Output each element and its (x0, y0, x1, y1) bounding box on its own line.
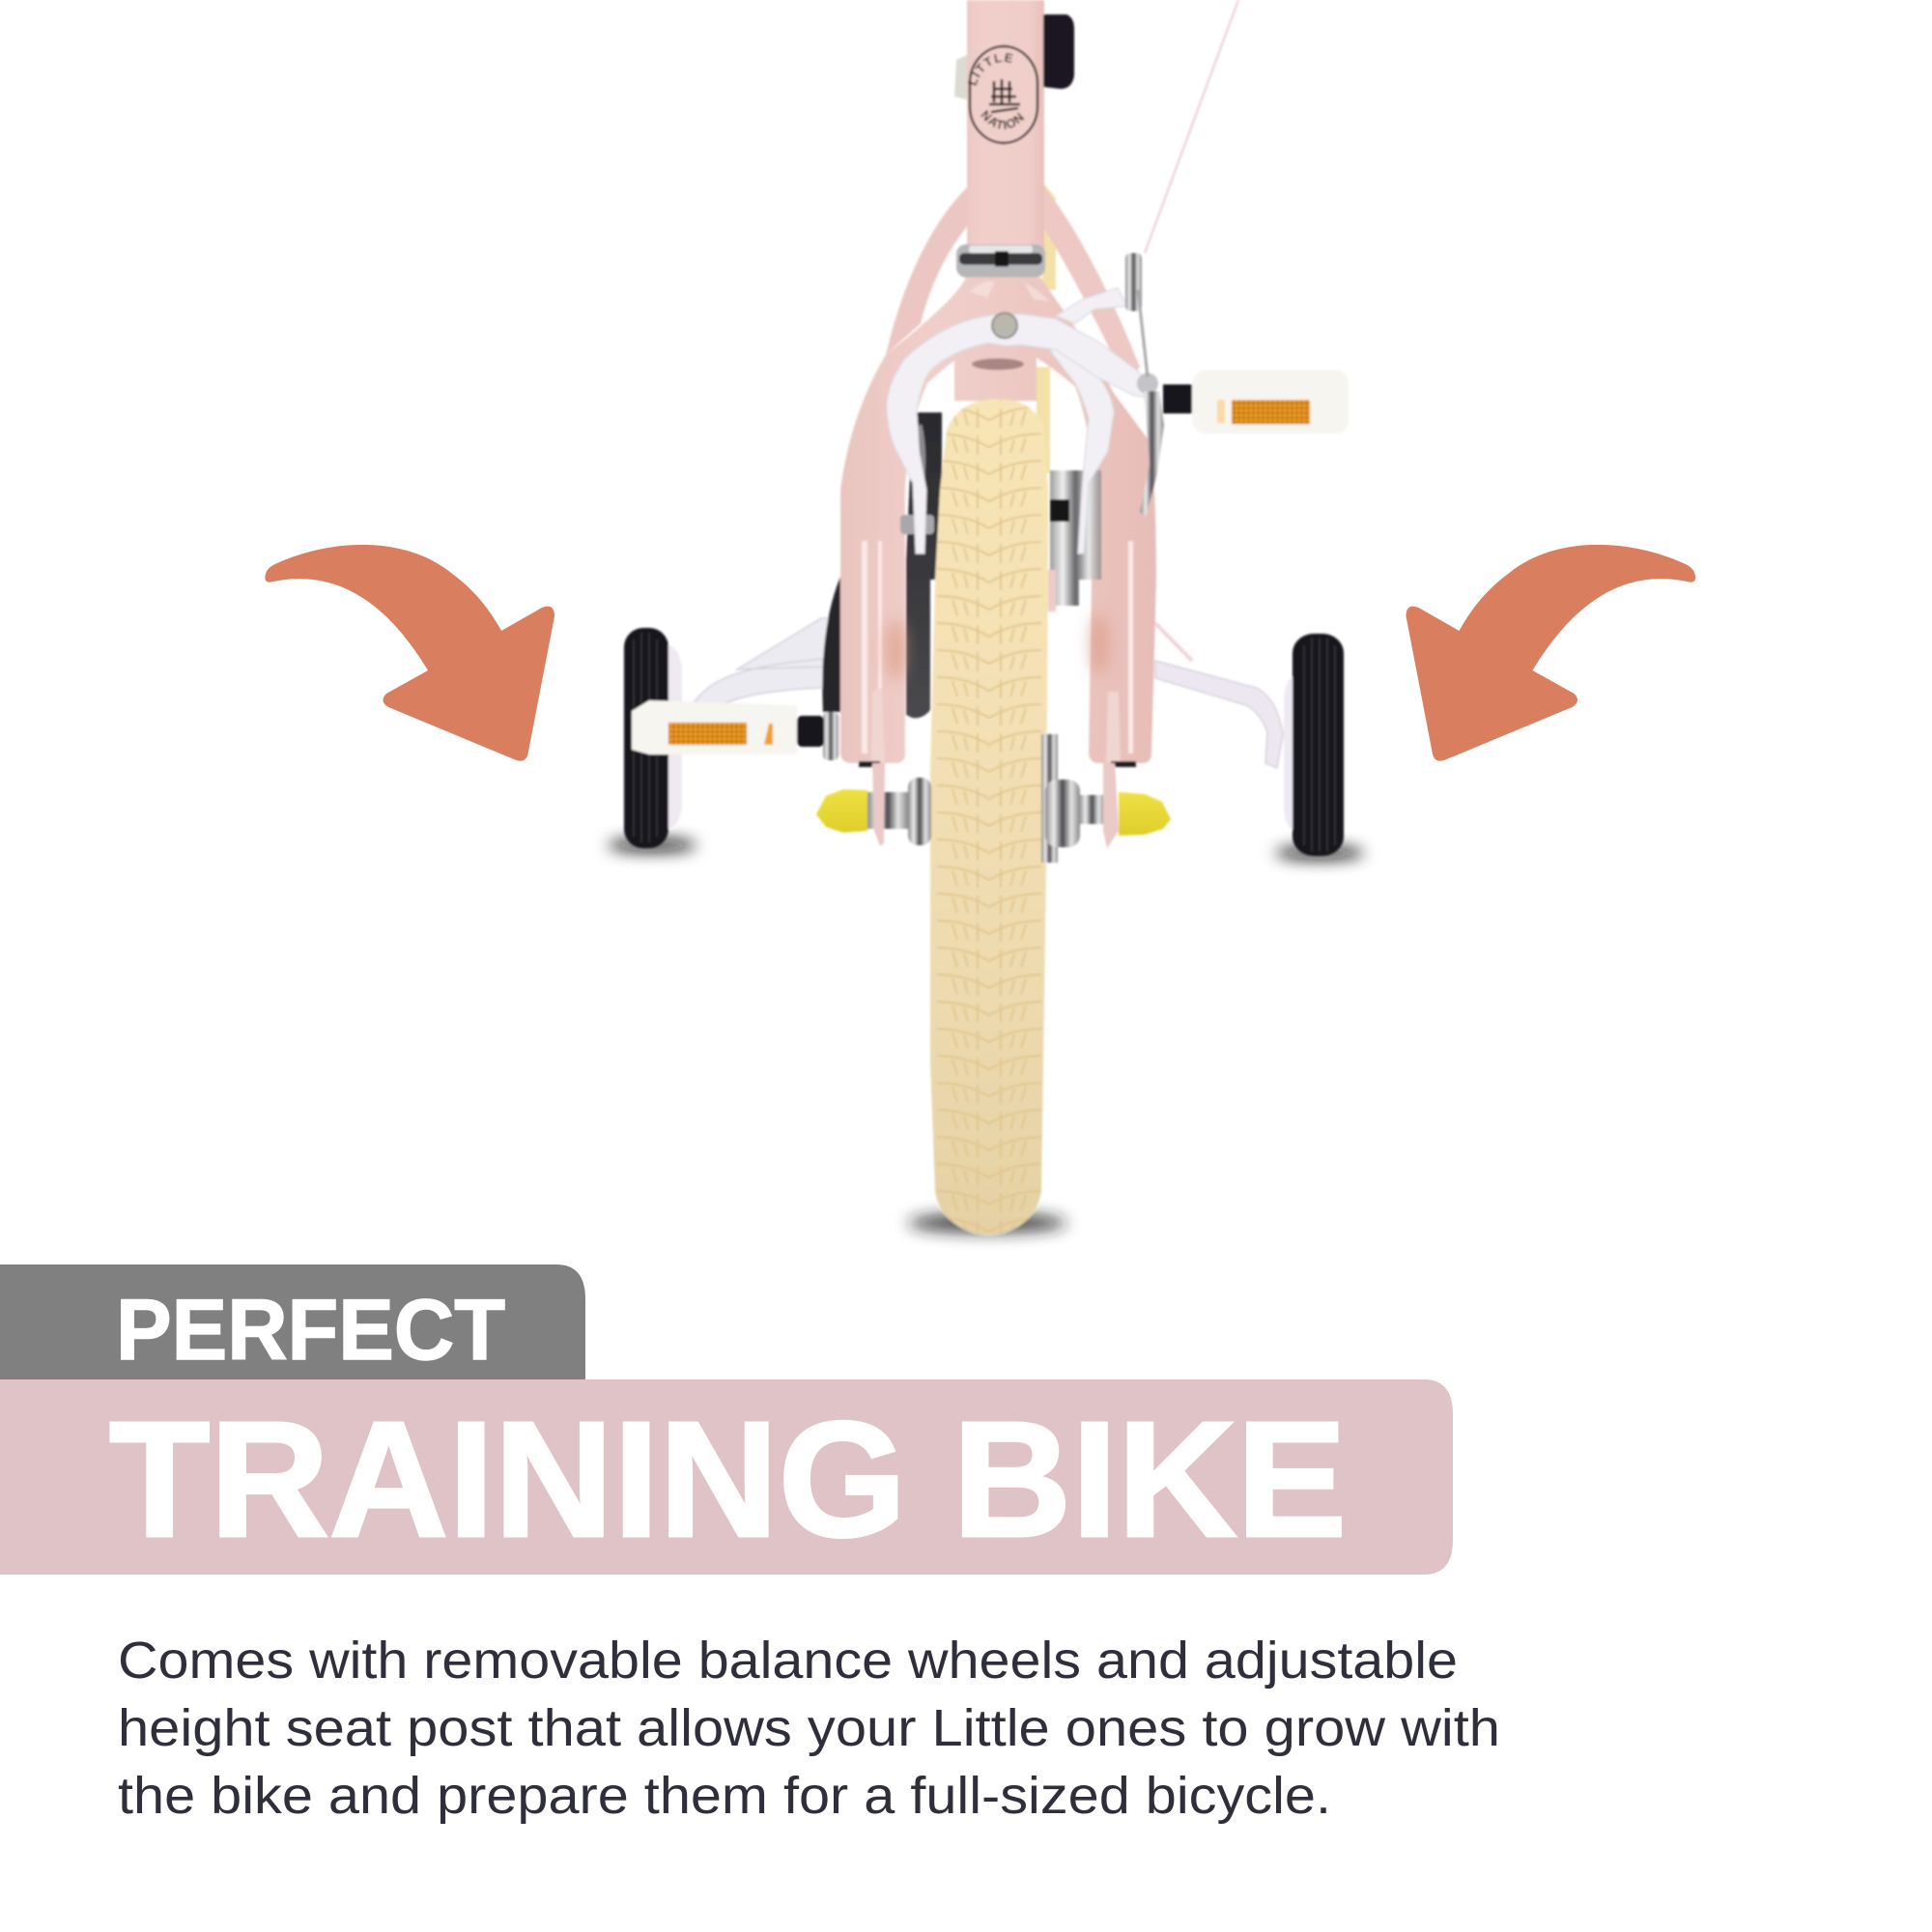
struts from head tube (886, 186, 969, 355)
cable (1145, 0, 1238, 253)
heading band: training bike: TRAINING BIKE (109, 1388, 1347, 1572)
front tyre (930, 399, 1048, 1235)
description text (118, 1632, 1500, 1825)
left pedal (632, 700, 838, 760)
description text: the bike and prepare them for a full-sized bicycle. (118, 1767, 1331, 1825)
head tube (967, 0, 1044, 256)
ground shadows (608, 838, 1364, 1233)
headset collar (956, 244, 1045, 277)
left stabiliser bracket (695, 618, 829, 710)
rear dark wheel behind fork (822, 577, 840, 712)
logo badge: LITTLE (967, 52, 1014, 87)
right stabiliser bracket (1155, 623, 1283, 768)
bicycle front view (600, 0, 1372, 1246)
black reflector (1043, 14, 1074, 89)
fork crown and legs (840, 277, 1156, 763)
right training wheel (1284, 634, 1344, 856)
logo badge: NATION (980, 109, 1025, 130)
rear fender strip (1037, 182, 1056, 473)
brake hardware right (1048, 470, 1101, 611)
fork crown oval (972, 358, 1024, 370)
logo badge (966, 43, 1040, 146)
heading band: perfect: PERFECT (116, 1281, 505, 1378)
fork leg highlights (859, 541, 1136, 767)
description text: Comes with removable balance wheels and adjustable (118, 1632, 1458, 1690)
brake hardware left (900, 515, 934, 534)
brake centre bolt (992, 313, 1017, 338)
description text: height seat post that allows your Little ones to grow with (118, 1699, 1500, 1757)
heading band: perfect (0, 1264, 585, 1379)
stem clip (954, 55, 967, 99)
brake lever chrome (1137, 290, 1164, 517)
arrow: right, pointing to training wheel (1406, 545, 1695, 761)
cable adjuster (1125, 253, 1142, 311)
arrow: left, pointing to training wheel (265, 545, 554, 761)
axle right (1041, 734, 1171, 863)
right pedal (1163, 370, 1349, 434)
left training wheel (624, 628, 682, 848)
brake caliper (887, 288, 1149, 554)
axle left (816, 763, 931, 846)
